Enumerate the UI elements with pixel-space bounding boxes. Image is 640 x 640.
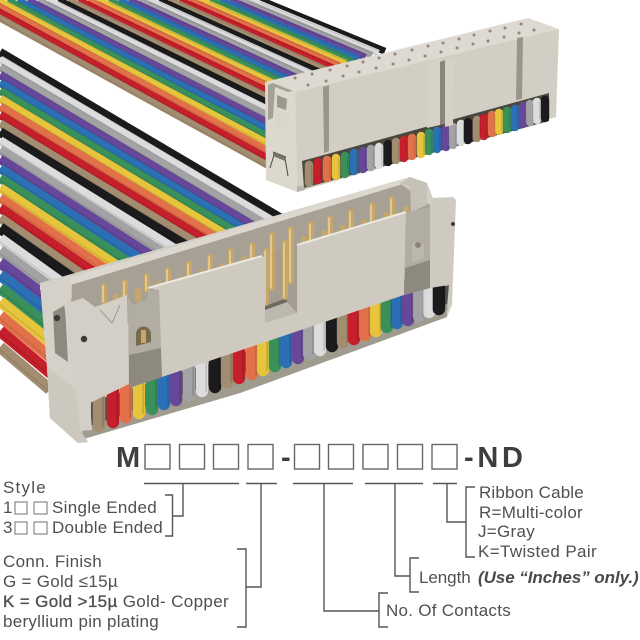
- socket grooves and latch blocks: [323, 37, 523, 153]
- socket wire ends: [309, 100, 548, 183]
- part number heading: [116, 442, 523, 474]
- style legend: Double Ended: [52, 518, 163, 537]
- ribbon cable legend: Ribbon Cable: [479, 483, 584, 502]
- mounting holes: [54, 315, 87, 342]
- socket front face: [295, 29, 559, 192]
- lower header connector: [40, 177, 456, 443]
- socket wire slot: [302, 93, 549, 188]
- base strip: [78, 304, 447, 443]
- leader lines and brackets: [144, 484, 475, 627]
- hyphen: -: [281, 442, 291, 474]
- left center latch window: [128, 288, 162, 388]
- suffix: -ND: [464, 442, 523, 474]
- length legend: Length: [419, 568, 471, 587]
- socket contact holes: [295, 24, 534, 85]
- left recess: [53, 305, 68, 362]
- lower rainbow ribbon cable: [0, 52, 285, 392]
- header back wall: [70, 184, 430, 330]
- code boxes: [145, 444, 457, 469]
- ribbon cable legend: J=Gray: [478, 522, 535, 541]
- connector finish legend: Conn. Finish: [3, 552, 102, 571]
- notch floor: [265, 302, 297, 323]
- style legend: Style: [3, 478, 46, 497]
- letter M: M: [116, 442, 140, 474]
- style legend: 1: [3, 498, 13, 517]
- polarity triangle: [100, 305, 120, 323]
- gold pins: [103, 199, 406, 303]
- front left panel: [64, 295, 129, 431]
- top face of socket: [265, 18, 559, 92]
- socket left end: [265, 82, 297, 192]
- connector finish legend: beryllium pin plating: [3, 612, 159, 631]
- ribbon cable legend: [478, 483, 597, 561]
- left lower block: [47, 367, 88, 443]
- header rear tower: [400, 177, 427, 212]
- length legend: (Use “Inches” only.): [478, 568, 639, 587]
- left outer block: [40, 278, 88, 443]
- upper socket connector: [265, 18, 559, 192]
- style legend: 3: [3, 518, 13, 537]
- header silhouette: [40, 177, 453, 443]
- right latch window: [404, 207, 430, 295]
- ribbon cable legend: R=Multi-color: [479, 503, 583, 522]
- style legend: [3, 478, 163, 537]
- ribbon cable legend: K=Twisted Pair: [478, 542, 597, 561]
- upper rainbow ribbon cable: [0, 0, 385, 169]
- wire slot: [91, 285, 449, 434]
- contacts legend: No. Of Contacts: [386, 601, 511, 620]
- connector finish legend: [3, 552, 229, 631]
- connector finish legend: K = Gold >15µ Gold- Copper: [3, 592, 229, 611]
- notch interior: [265, 245, 297, 323]
- wire ends: [99, 275, 443, 426]
- connector finish legend: G = Gold ≤15µ: [3, 572, 118, 591]
- right outer block: [430, 197, 456, 307]
- right block hole: [451, 222, 455, 226]
- main panel left: [148, 212, 406, 377]
- header top rim: [40, 177, 410, 290]
- socket latch lever: [268, 83, 305, 192]
- style legend: Single Ended: [52, 498, 157, 517]
- panel top highlight: [148, 212, 406, 288]
